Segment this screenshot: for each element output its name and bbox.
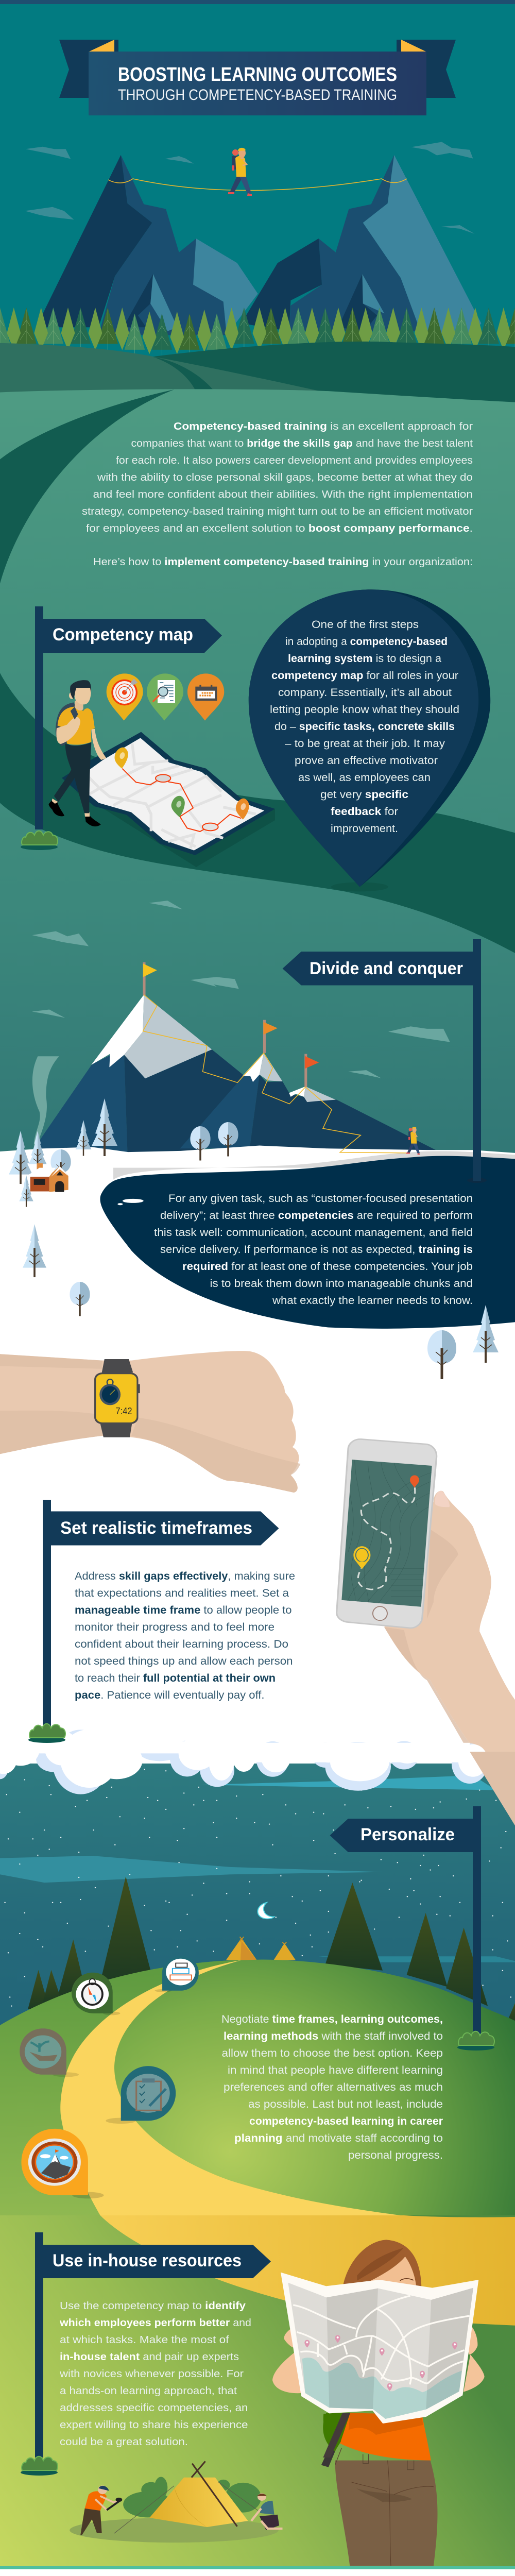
callout text: get very specific — [320, 789, 408, 801]
sign board — [43, 619, 222, 653]
sky bands — [0, 1775, 515, 1962]
lake — [113, 1151, 515, 1180]
in-house text: in-house talent and pair up experts — [60, 2351, 239, 2363]
icon pin: mountain goal — [21, 2129, 104, 2198]
bush — [457, 2031, 494, 2050]
lake text: required for at least one of these competencies. Your job — [182, 1261, 473, 1273]
in-house text: which employees perform better and — [59, 2317, 251, 2329]
path — [100, 2215, 515, 2326]
timeframes text — [75, 1570, 295, 1701]
callout text: – to be great at their job. It may — [285, 738, 445, 750]
callout text: feedback for — [331, 806, 398, 818]
icon pin: target — [107, 673, 143, 721]
woman reading map, lower body — [321, 2414, 438, 2566]
tree line — [0, 308, 515, 357]
bush — [21, 831, 58, 850]
sign heading: Competency map — [53, 625, 193, 645]
timeframes text: manageable time frame to allow people to — [75, 1604, 291, 1616]
sky — [0, 4, 515, 396]
intro paragraph: strategy, competency-based training might turn out to be an efficient motivator — [82, 506, 473, 517]
icon pin: calendar — [187, 673, 224, 721]
timeframes text: pace. Patience will eventually pay off. — [75, 1689, 265, 1701]
sign heading: Use in-house resources — [53, 2251, 242, 2270]
in-house text — [59, 2300, 251, 2448]
sign heading: Divide and conquer — [310, 959, 463, 978]
icon pin: clipboard — [106, 2066, 176, 2124]
in-house text: could be a great solution. — [60, 2436, 188, 2448]
timeframes text: monitor their progress and to feel more — [75, 1621, 274, 1633]
head and hair — [344, 2240, 421, 2287]
night sky — [0, 1764, 515, 2089]
intro paragraph: for each role. It also powers career development and provides employees — [116, 455, 473, 466]
map — [62, 732, 275, 867]
personalize text: personal progress. — [348, 2149, 443, 2161]
timeframes text: that expectations and realities meet. Set a — [75, 1587, 289, 1599]
callout text: One of the first steps — [312, 619, 419, 631]
right mountain — [242, 155, 481, 335]
intro paragraph: companies that want to bridge the skills gap and have the best talent — [131, 438, 473, 449]
person with backpack — [49, 680, 107, 826]
panel: use in-house resources — [0, 2215, 515, 2566]
middle and small peak — [180, 1053, 437, 1150]
hills and road — [0, 342, 515, 584]
hiker on tightrope — [228, 148, 252, 196]
timeframes text: to reach their full potential at their own — [75, 1672, 276, 1684]
in-house text: a hands-on learning approach, that — [60, 2385, 237, 2397]
signpost — [282, 939, 487, 1183]
callout text: competency map for all roles in your — [271, 670, 458, 682]
clouds — [32, 977, 450, 1078]
intro paragraph: for employees and an excellent solution to boost company performance . — [86, 523, 473, 534]
man with tent peg — [251, 2493, 283, 2530]
panel: divide and conquer — [0, 939, 515, 1379]
intro paragraph — [82, 421, 473, 568]
top bar — [0, 0, 515, 4]
personalize text: competency-based learning in career — [249, 2115, 443, 2127]
personalize text: preferences and offer alternatives as much — [224, 2081, 443, 2093]
icon pin: compass — [72, 1973, 120, 2015]
personalize text: as possible. Last but not least, include — [248, 2098, 443, 2110]
personalize text: Negotiate time frames, learning outcomes, — [221, 2013, 443, 2025]
snowy trees — [9, 1098, 499, 1379]
watch time: 7:42 — [115, 1406, 132, 1416]
forearm — [470, 1752, 515, 1826]
callout text: improvement. — [331, 823, 398, 835]
sign heading: Personalize — [360, 1825, 455, 1844]
lake text: is to break them down into manageable chunks and — [210, 1278, 473, 1290]
callout text: in adopting a competency-based — [285, 636, 448, 648]
bush — [21, 2456, 58, 2476]
callout text — [270, 619, 459, 835]
subtitle text: THROUGH COMPETENCY-BASED TRAINING — [118, 87, 397, 104]
lake text: service delivery. If performance is not as expected, training is — [160, 1244, 473, 1256]
personalize text: in mind that people have different learning — [228, 2064, 443, 2076]
personalize text: planning and motivate staff according to — [234, 2132, 443, 2144]
arms and hands — [272, 2324, 485, 2393]
snow ground — [0, 1146, 515, 1365]
personalize text — [221, 2013, 443, 2161]
title text: BOOSTING LEARNING OUTCOMES — [118, 64, 397, 86]
scene: mountains, trees and hills — [0, 142, 515, 584]
camp scene — [70, 2461, 283, 2543]
footer — [0, 2566, 515, 2576]
stars — [5, 1769, 511, 2006]
callout text: do – specific tasks, concrete skills — [274, 721, 455, 733]
sign heading: Set realistic timeframes — [60, 1518, 252, 1538]
timeframes text: not speed things up and allow each person — [75, 1655, 293, 1667]
timeframes text: Address skill gaps effectively , making sure — [75, 1570, 295, 1582]
icon pin: document and magnifier — [147, 673, 183, 721]
panel: set realistic timeframes — [0, 1351, 515, 1777]
climbing route — [143, 995, 407, 1153]
personalize text: allow them to choose the best option. Keep — [221, 2047, 443, 2059]
in-house text: Use the competency map to identify — [60, 2300, 246, 2312]
man with mallet — [80, 2485, 122, 2535]
path — [60, 1960, 401, 2215]
left mountain — [36, 155, 258, 335]
arm with smartwatch — [0, 1351, 301, 1493]
panel: personalize — [0, 1724, 515, 2215]
flags — [143, 962, 319, 1087]
phone in hand — [337, 1439, 515, 1777]
clouds — [25, 142, 475, 234]
panel: competency map — [0, 589, 515, 2576]
intro paragraph: with the ability to close personal skill gaps, become better at what they do — [97, 472, 473, 483]
winding road — [0, 673, 515, 953]
title banner — [59, 40, 456, 115]
intro paragraph: and feel more confident about their abilities. With the right implementation — [93, 489, 473, 500]
lake text: For any given task, such as “customer-focused presentation — [168, 1193, 473, 1205]
personalize text: learning methods with the staff involved to — [224, 2030, 443, 2042]
signpost — [35, 606, 43, 829]
clouds — [0, 1730, 515, 1826]
shirt and backpack — [323, 2413, 431, 2458]
signpost — [43, 1500, 279, 1731]
in-house text: at which tasks. Make the most of — [60, 2334, 229, 2346]
icon pin: plant in hand — [20, 2028, 79, 2077]
callout text: as well, as employees can — [298, 772, 431, 784]
lake text: what exactly the learner needs to know. — [272, 1295, 473, 1307]
tents — [226, 1937, 296, 1960]
tightrope — [108, 179, 407, 191]
green hillside background — [0, 388, 515, 1166]
big pin callout — [249, 589, 490, 891]
lake text — [154, 1193, 473, 1307]
tent — [114, 2461, 260, 2533]
tallest mountain — [33, 995, 245, 1153]
small hiker — [406, 1127, 420, 1155]
grassy hill — [0, 1960, 515, 2215]
bush at timeframes signpost — [28, 1724, 65, 1743]
timeframes text: confident about their learning process. Do — [75, 1638, 288, 1650]
map pins — [304, 2335, 457, 2391]
intro paragraph: Competency-based training is an excellent approach for — [174, 421, 473, 432]
moon — [258, 1903, 274, 1919]
in-house text: with novices whenever possible. For — [59, 2368, 244, 2380]
meadow — [0, 2215, 515, 2566]
mountains and snow scene — [0, 962, 515, 1365]
in-house text: expert willing to share his experience — [60, 2419, 248, 2431]
woman holding map — [272, 2240, 485, 2458]
intro paragraph: Here’s how to implement competency-based training in your organization: — [93, 556, 473, 568]
callout text: company. Essentially, it’s all about — [278, 687, 452, 699]
callout text: letting people know what they should — [270, 704, 459, 716]
callout text: prove an effective motivator — [295, 755, 438, 767]
lake text: delivery”; at least three competencies are required to perform — [160, 1210, 473, 1222]
map and person illustration — [49, 673, 275, 867]
cabin — [28, 1163, 70, 1192]
signpost — [35, 2232, 271, 2458]
dark pines — [28, 1876, 515, 2024]
in-house text: addresses specific competencies, an — [60, 2402, 248, 2414]
lake text: this task well: communication, account management, and field — [154, 1227, 473, 1239]
callout text: learning system is to design a — [288, 653, 441, 665]
open paper map — [281, 2273, 478, 2424]
icon pin: books — [154, 1956, 199, 1992]
chimney smoke — [32, 1056, 59, 1151]
signpost — [330, 1806, 481, 2035]
